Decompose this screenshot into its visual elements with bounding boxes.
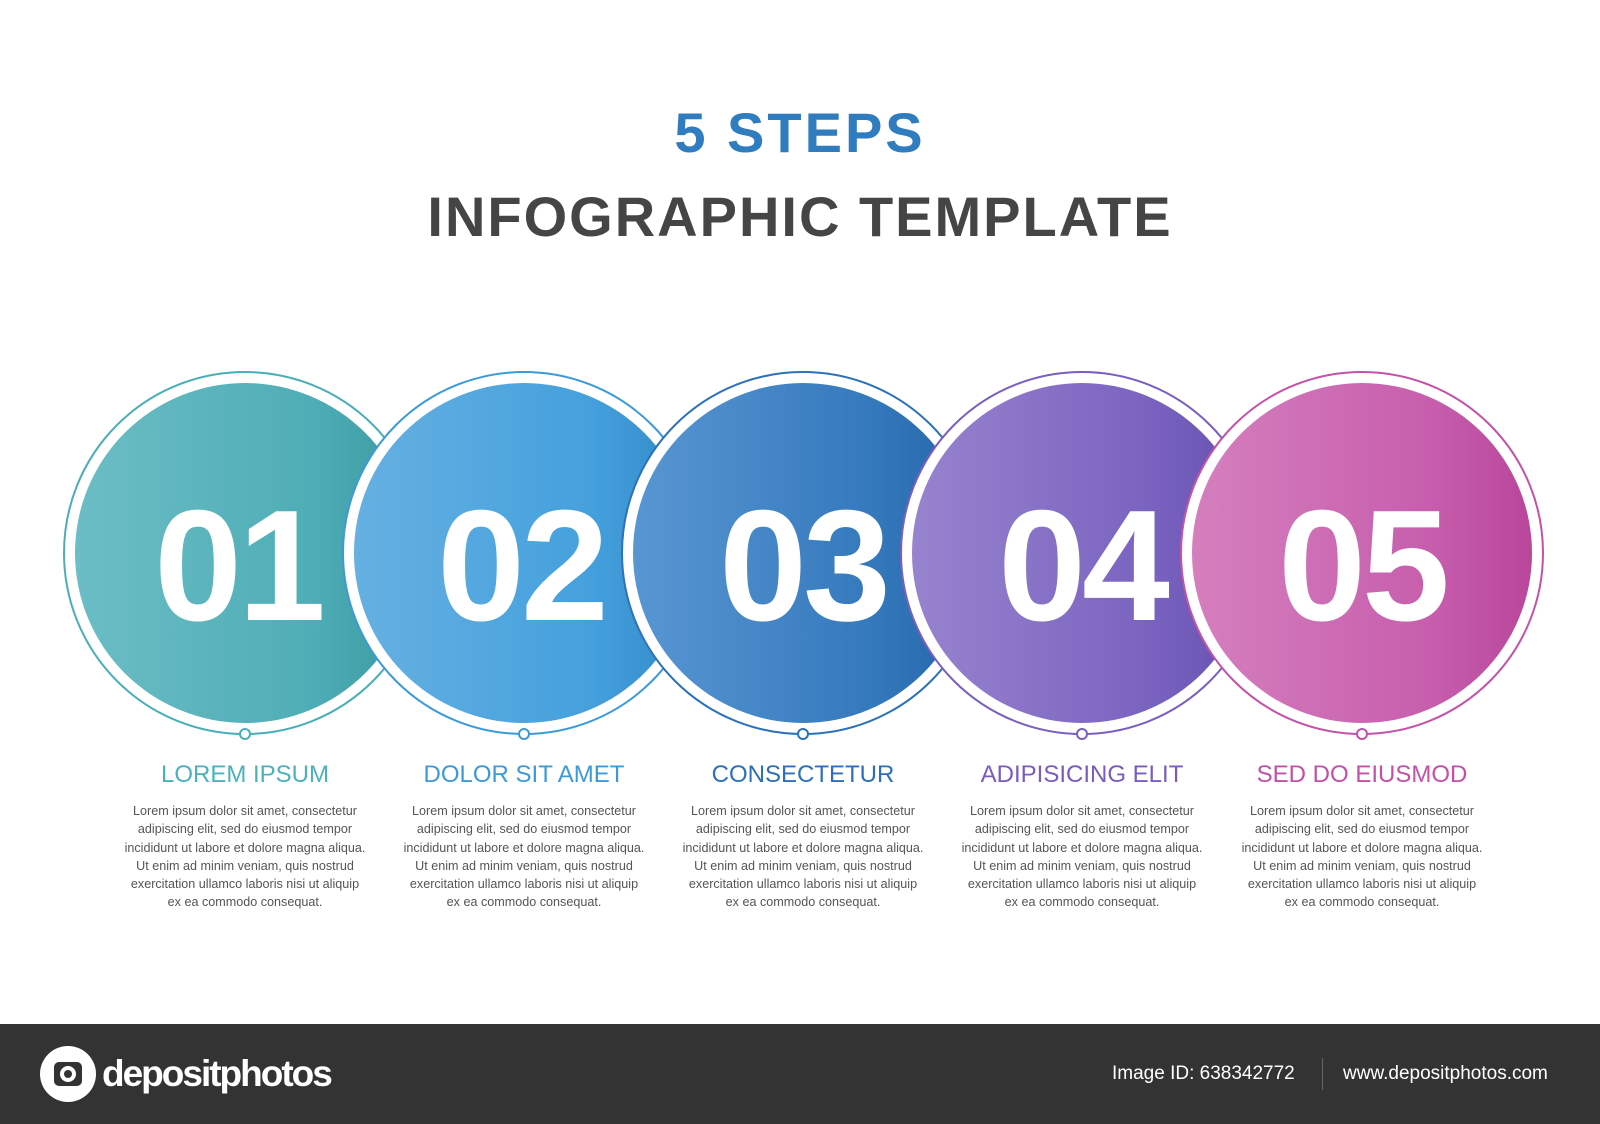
footer bar bbox=[0, 1024, 1600, 1124]
circle 04: 04 bbox=[998, 478, 1170, 654]
text 1: incididunt ut labore et dolore magna aliqua. bbox=[125, 841, 365, 855]
label 2: DOLOR SIT AMET bbox=[424, 761, 624, 788]
circles chart bbox=[63, 371, 1544, 740]
logo text: depositphotos bbox=[102, 1053, 331, 1094]
circle 05 bbox=[1181, 372, 1543, 739]
text 2 bbox=[404, 804, 644, 909]
circle 03: 03 bbox=[719, 478, 887, 654]
text 4: Lorem ipsum dolor sit amet, consectetur bbox=[970, 804, 1194, 818]
divider bbox=[1322, 1058, 1323, 1090]
circle 04 bbox=[901, 372, 1263, 739]
text 4: Ut enim ad minim veniam, quis nostrud bbox=[973, 859, 1191, 873]
icon: camera logo bbox=[40, 1046, 96, 1102]
title bbox=[427, 101, 1173, 248]
text 4 bbox=[962, 804, 1202, 909]
text 3: incididunt ut labore et dolore magna aliqua. bbox=[683, 841, 923, 855]
label 1: LOREM IPSUM bbox=[161, 761, 329, 788]
text 1: Lorem ipsum dolor sit amet, consectetur bbox=[133, 804, 357, 818]
circle 01: 01 bbox=[154, 478, 322, 654]
text 1 bbox=[125, 804, 365, 909]
circle 01 bbox=[64, 372, 426, 739]
text 2: incididunt ut labore et dolore magna aliqua. bbox=[404, 841, 644, 855]
circle 03 bbox=[622, 372, 984, 739]
text 4: ex ea commodo consequat. bbox=[1005, 895, 1159, 909]
text 5: exercitation ullamco laboris nisi ut aliquip bbox=[1248, 877, 1476, 891]
circle 02: 02 bbox=[437, 478, 605, 654]
text 5: ex ea commodo consequat. bbox=[1285, 895, 1439, 909]
text 4: exercitation ullamco laboris nisi ut aliquip bbox=[968, 877, 1196, 891]
text 2: adipiscing elit, sed do eiusmod tempor bbox=[417, 822, 631, 836]
text 2: Lorem ipsum dolor sit amet, consectetur bbox=[412, 804, 636, 818]
text 1: Ut enim ad minim veniam, quis nostrud bbox=[136, 859, 354, 873]
text 5: Ut enim ad minim veniam, quis nostrud bbox=[1253, 859, 1471, 873]
text 2: ex ea commodo consequat. bbox=[447, 895, 601, 909]
label 5: SED DO EIUSMOD bbox=[1257, 761, 1467, 788]
circle 02 bbox=[343, 372, 705, 739]
website: www.depositphotos.com bbox=[1343, 1063, 1548, 1084]
text 3: adipiscing elit, sed do eiusmod tempor bbox=[696, 822, 910, 836]
heading: infographic template: INFOGRAPHIC TEMPLATE bbox=[427, 185, 1173, 248]
text 2: exercitation ullamco laboris nisi ut aliquip bbox=[410, 877, 638, 891]
text 3: Lorem ipsum dolor sit amet, consectetur bbox=[691, 804, 915, 818]
text 1: ex ea commodo consequat. bbox=[168, 895, 322, 909]
text 3: ex ea commodo consequat. bbox=[726, 895, 880, 909]
text 4: incididunt ut labore et dolore magna aliqua. bbox=[962, 841, 1202, 855]
label 4: ADIPISICING ELIT bbox=[981, 761, 1183, 788]
text 5: Lorem ipsum dolor sit amet, consectetur bbox=[1250, 804, 1474, 818]
text 1: adipiscing elit, sed do eiusmod tempor bbox=[138, 822, 352, 836]
text 2: Ut enim ad minim veniam, quis nostrud bbox=[415, 859, 633, 873]
text 4: adipiscing elit, sed do eiusmod tempor bbox=[975, 822, 1189, 836]
heading: 5 steps: 5 STEPS bbox=[674, 101, 926, 164]
image id: Image ID: 638342772 bbox=[1112, 1063, 1295, 1084]
text 1: exercitation ullamco laboris nisi ut aliquip bbox=[131, 877, 359, 891]
text 5: adipiscing elit, sed do eiusmod tempor bbox=[1255, 822, 1469, 836]
circle 05: 05 bbox=[1278, 478, 1446, 654]
text 3: Ut enim ad minim veniam, quis nostrud bbox=[694, 859, 912, 873]
text 5: incididunt ut labore et dolore magna aliqua. bbox=[1242, 841, 1482, 855]
text 3 bbox=[683, 804, 923, 909]
label 3: CONSECTETUR bbox=[712, 761, 894, 788]
text 3: exercitation ullamco laboris nisi ut aliquip bbox=[689, 877, 917, 891]
text 5 bbox=[1242, 804, 1482, 909]
